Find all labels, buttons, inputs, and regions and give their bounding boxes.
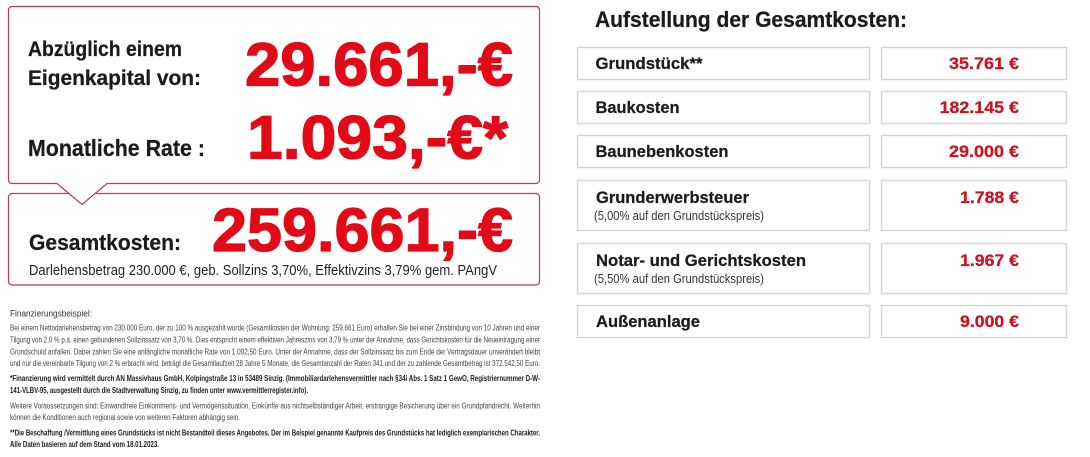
row: Baunebenkosten: 29.000 € [949, 142, 1020, 161]
financing example paragraph: Bei einem Nettodarlehensbetrag von 230.000 Euro, der zu 100 % ausgezahlt wurde (Gesamtkosten der Wohnung: 259.661 Euro) erhalten Sie bei einer Zinsbindung von 10 Jahren und einer [10, 324, 540, 332]
mediation note: *Finanzierung wird vermittelt durch AN Massivhaus GmbH, Kolpingstraße 13 in 53489 Sinzig. (Immobiliardarlehensvermittler nach §34i Abs. 1 Satz 1 GewO, Registriernummer D-W- [10, 374, 540, 383]
row: Grundstück [578, 48, 1066, 80]
row: Grunderwerbsteuer: (5,00% auf den Grundstückspreis) [594, 209, 764, 223]
row: Baukosten: Baukosten [596, 98, 680, 117]
value: equity: 29.661,-€ [245, 30, 513, 98]
financing example paragraph: Tilgung von 2,0 % p.a. einen gebundenen Sollzinssatz von 3,70 %. Dies entspricht einem effektiven Jahreszins von 3,79 % unter der Annahme, dass Gerichtskosten für die Neueintragung einer [10, 335, 540, 344]
row: Baukosten: 182.145 € [940, 98, 1020, 117]
callout box: equity and monthly rate [8, 6, 540, 204]
requirements note: Weitere Voraussetzungen sind: Einwandfreie Einkommens- und Vermögenssituation, Einkünfte aus nichtselbständiger Arbeit, erstrangige Besicherung über ein Grundpfandrecht. Weiterhin [10, 402, 540, 410]
mediation note [10, 374, 540, 395]
financing example paragraph [10, 324, 541, 368]
row: Baunebenkosten: Baunebenkosten [596, 142, 728, 161]
panel: financing summary [8, 6, 540, 285]
row: Außenanlage: Außenanlage [596, 312, 700, 331]
heading: cost breakdown: Aufstellung der Gesamtkosten: [595, 7, 907, 32]
text block: fine print [10, 308, 541, 449]
label: total costs: Gesamtkosten: [29, 230, 181, 255]
row: Grunderwerbsteuer [578, 180, 1066, 230]
label: equity: Eigenkapital von: [28, 67, 201, 90]
row: Grundstück: 35.761 € [949, 54, 1020, 73]
row: Notar- und Gerichtskosten: (5,50% auf den Grundstückspreis) [594, 272, 764, 286]
financing example paragraph: Grundschuld anfallen. Dabei zahlen Sie eine anfängliche monatliche Rate von 1.092,50 Euro. Unter der Annahme, dass der Sollzinssatz bis zum Ende der Vertragsdauer unverändert bleibt [10, 347, 541, 356]
requirements note [10, 402, 540, 422]
row: Grunderwerbsteuer: Grunderwerbsteuer [596, 188, 749, 207]
requirements note: können die Konditionen auch regional sowie von weiteren Faktoren abhängig sein. [10, 413, 240, 422]
fine print heading: Finanzierungsbeispiel: [10, 308, 92, 318]
label: equity: Abzüglich einem [28, 38, 182, 61]
box: total costs [8, 194, 540, 285]
row: Außenanlage: 9.000 € [960, 312, 1020, 331]
row: Baukosten [578, 92, 1066, 124]
label: equity [28, 38, 201, 90]
row: Notar- und Gerichtskosten: 1.967 € [960, 251, 1020, 270]
row: Notar- und Gerichtskosten: Notar- und Gerichtskosten [596, 251, 806, 270]
panel: cost table [578, 48, 1066, 338]
value: monthly rate: 1.093,-€* [247, 104, 508, 172]
mediation note: 141-VLBV-95, ausgestellt durch die Stadtverwaltung Sinzig, zu finden unter www.vermittlerregister.info). [10, 386, 308, 395]
land purchase note: Alle Daten basieren auf dem Stand vom 18.01.2023. [10, 440, 159, 449]
label: monthly rate: Monatliche Rate : [28, 135, 205, 161]
land purchase note: **Die Beschaffung /Vermittlung eines Grundstücks ist nicht Bestandteil dieses Angebotes. Der im Beispiel genannte Kaufpreis des Grundstücks hat lediglich exemplarischen Charakter. [10, 428, 540, 438]
row: Außenanlage [578, 306, 1066, 338]
row: Baunebenkosten [578, 136, 1066, 168]
financing example paragraph: und nur die vereinbarte Tilgung von 2 % erbracht wird, beträgt die Gesamtlaufzeit 28 Jahre 5 Monate, die Gesamtanzahl der Raten 341 und der zu zahlende Gesamtbetrag ist 372.542,50 Euro. [10, 359, 540, 368]
land purchase note [10, 428, 540, 449]
row: Grunderwerbsteuer: 1.788 € [960, 188, 1020, 207]
value: total costs: 259.661,-€ [212, 196, 513, 264]
loan details: Darlehensbetrag 230.000 €, geb. Sollzins 3,70%, Effektivzins 3,79% gem. PAngV [29, 262, 497, 279]
row: Notar- und Gerichtskosten [578, 244, 1066, 294]
row: Grundstück: Grundstück** [596, 54, 703, 73]
